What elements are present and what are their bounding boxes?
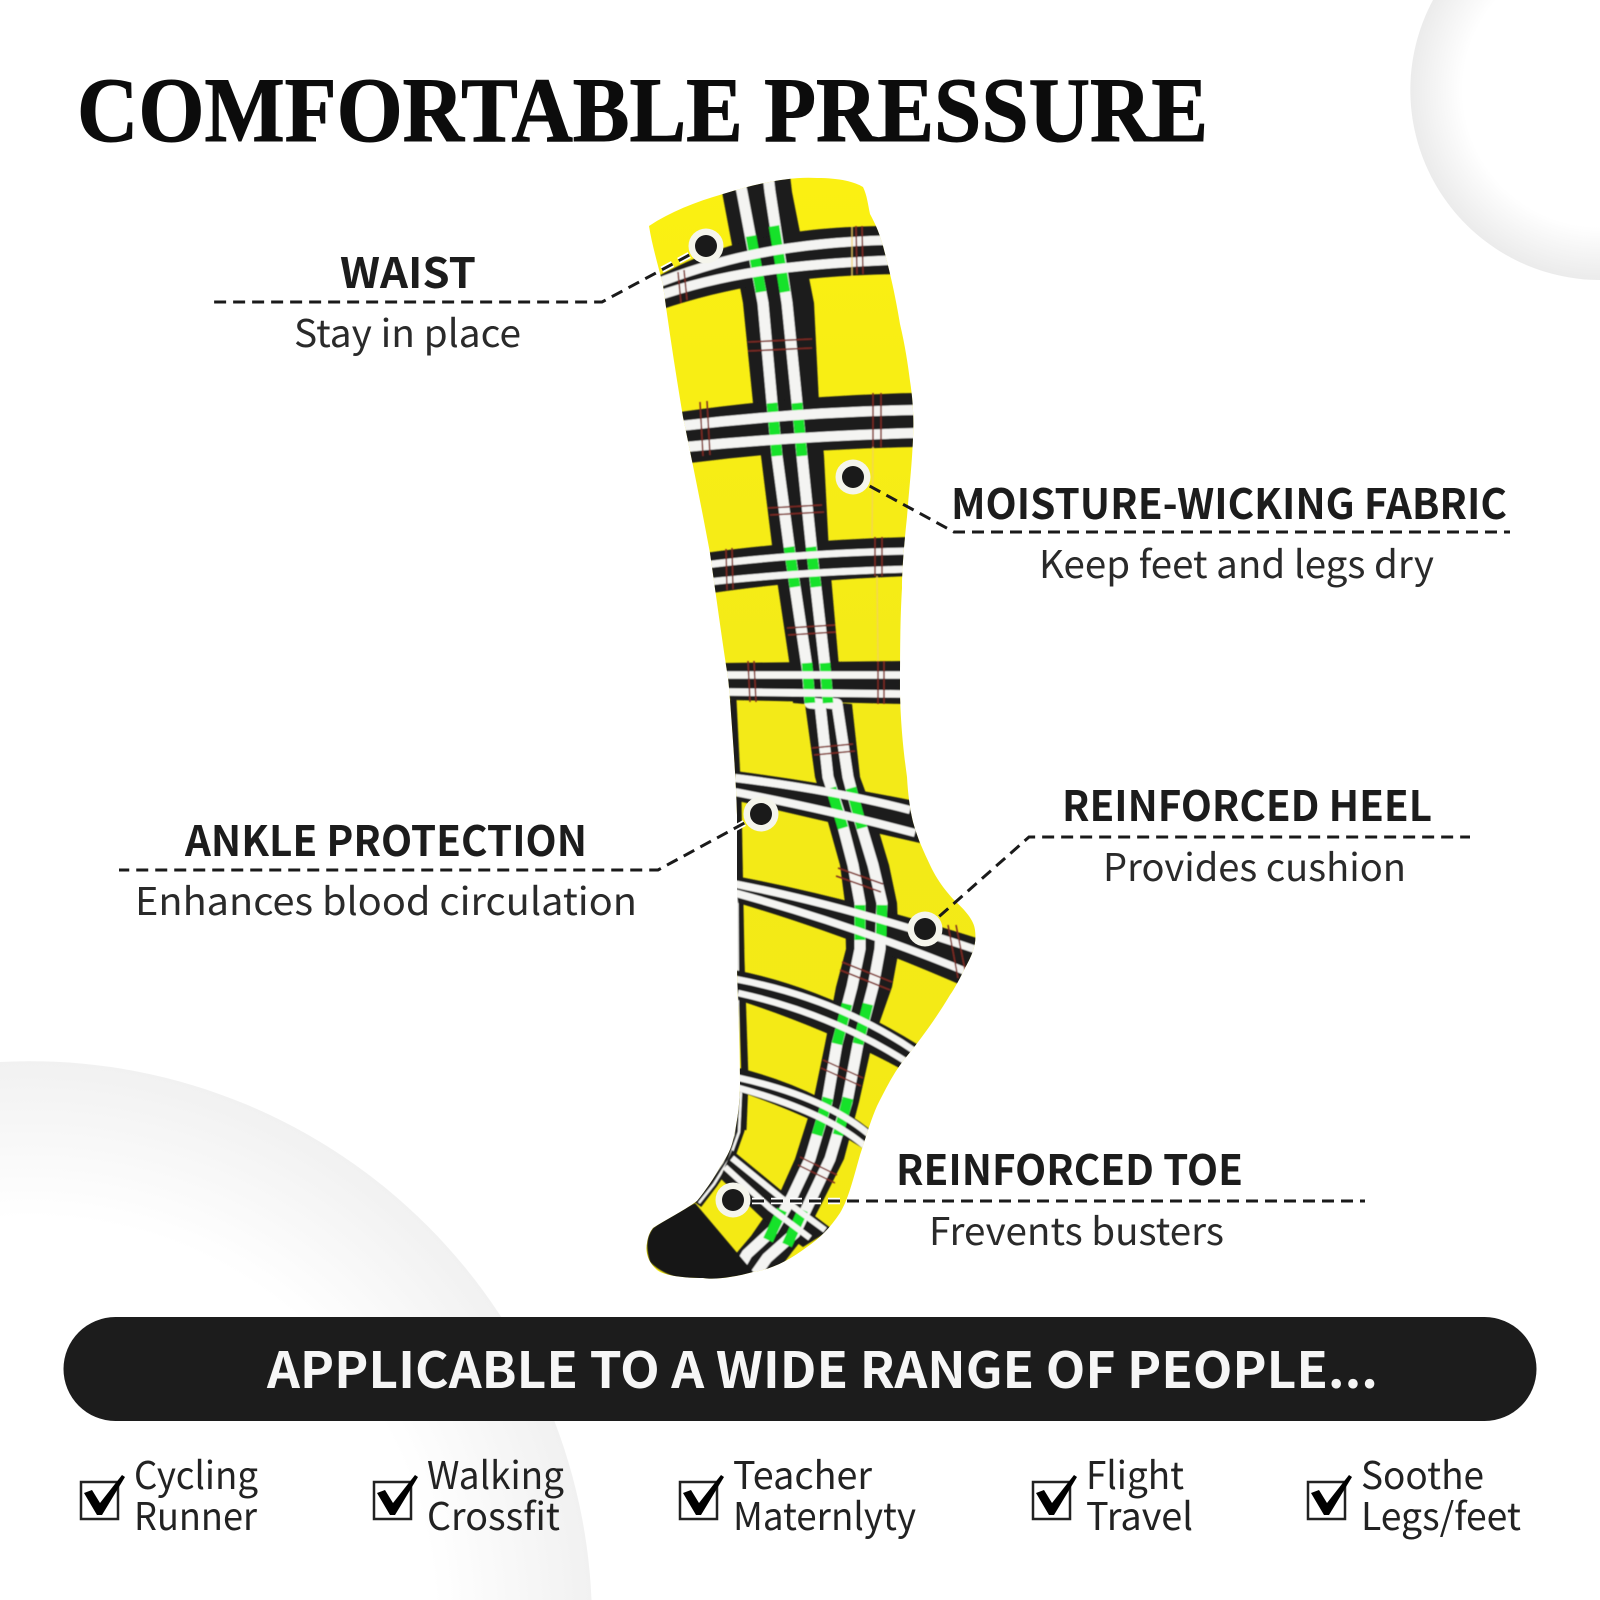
label: reinforced heel: REINFORCED HEEL	[1062, 773, 1432, 834]
item: soothe legs/feet: Soothe	[1361, 1445, 1484, 1500]
sock body	[646, 178, 975, 1279]
left edge stripes	[692, 700, 745, 1203]
item: walking crossfit	[374, 1445, 564, 1541]
item: walking crossfit: Walking	[427, 1445, 564, 1500]
item: teacher maternity: Maternlyty	[733, 1486, 916, 1541]
banner	[64, 1317, 1536, 1421]
toe cap	[647, 1203, 755, 1282]
horizontal bands black	[648, 226, 980, 1247]
horizontal band white strands	[650, 240, 980, 1238]
item: cycling runner: Cycling	[134, 1445, 258, 1500]
label: waist: Stay in place	[294, 303, 521, 358]
label: reinforced toe: REINFORCED TOE	[896, 1137, 1243, 1198]
label: reinforced heel	[1062, 773, 1432, 892]
label: waist	[294, 240, 521, 358]
item: teacher maternity	[680, 1445, 916, 1541]
background circle: bottom left	[0, 1061, 592, 1600]
vertical band white strands	[735, 175, 882, 1275]
item: soothe legs/feet: Legs/feet	[1361, 1486, 1521, 1541]
item: soothe legs/feet	[1308, 1445, 1521, 1541]
label: moisture-wicking fabric: MOISTURE-WICKING FABRIC	[951, 471, 1507, 532]
marker: reinforced toe	[716, 1182, 750, 1218]
marker: ankle protection	[744, 796, 778, 832]
item: cycling runner: Runner	[134, 1486, 257, 1541]
vertical band black	[719, 175, 899, 1275]
green crossings	[751, 226, 882, 1245]
item: cycling runner	[81, 1445, 258, 1541]
label: moisture-wicking fabric: Keep feet and legs dry	[1039, 534, 1434, 589]
item: teacher maternity: Teacher	[733, 1445, 872, 1500]
callout line: ankle protection	[119, 814, 761, 870]
callout line: moisture-wicking fabric	[853, 477, 1510, 532]
title: COMFORTABLE PRESSURE	[77, 59, 1208, 161]
banner: APPLICABLE TO A WIDE RANGE OF PEOPLE...	[266, 1331, 1378, 1403]
label: ankle protection	[135, 808, 637, 926]
callout line: reinforced heel	[925, 837, 1470, 929]
item: flight travel: Travel	[1086, 1486, 1193, 1541]
red and yellow accent threads	[678, 226, 966, 1183]
item: walking crossfit: Crossfit	[427, 1486, 560, 1541]
label: reinforced heel: Provides cushion	[1103, 837, 1406, 892]
marker: moisture-wicking fabric	[836, 460, 870, 494]
sock illustration	[646, 175, 980, 1282]
callout line: reinforced toe	[733, 1198, 1365, 1204]
marker: reinforced heel	[908, 912, 942, 946]
plaid pattern	[647, 175, 980, 1282]
label: reinforced toe	[896, 1137, 1243, 1256]
item: flight travel	[1033, 1445, 1193, 1541]
background circle: top right	[1410, 0, 1600, 280]
marker: waist	[688, 228, 724, 264]
label: moisture-wicking fabric	[951, 471, 1507, 589]
label: waist: WAIST	[340, 240, 476, 301]
label: reinforced toe: Frevents busters	[929, 1201, 1224, 1256]
item: flight travel: Flight	[1086, 1445, 1184, 1500]
label: ankle protection: Enhances blood circulation	[135, 871, 637, 926]
label: ankle protection: ANKLE PROTECTION	[184, 808, 587, 869]
callout line: waist	[213, 246, 706, 302]
